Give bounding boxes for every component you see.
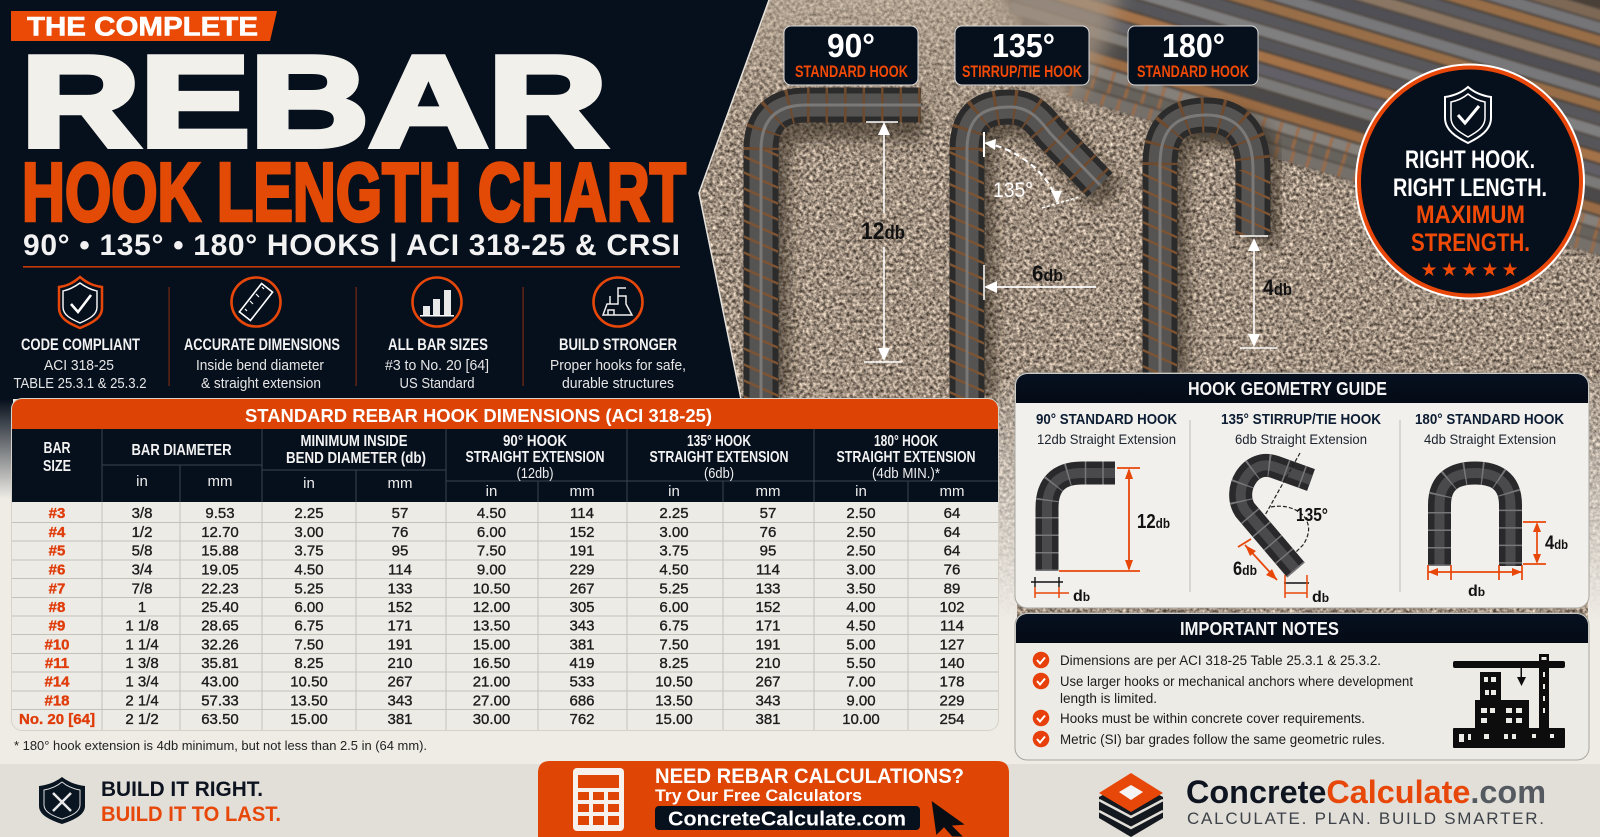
table rows: 22.23 (201, 580, 239, 598)
table rows: 3/4 (132, 562, 152, 578)
feature: all bar sizes (385, 278, 489, 392)
table rows: 191 (387, 636, 413, 654)
table rows: 15.00 (473, 636, 510, 654)
table rows: 15.00 (655, 711, 693, 728)
table rows: 15.00 (290, 711, 328, 728)
table header: in (855, 483, 867, 500)
table rows: 2.50 (846, 542, 876, 560)
logo: concrete calculate (1099, 773, 1546, 837)
table rows: 762 (569, 711, 595, 728)
table rows: 6.00 (294, 599, 324, 616)
note text: length is limited. (1060, 691, 1157, 706)
table rows: 5.50 (846, 655, 876, 672)
table rows: 8.25 (294, 655, 324, 672)
label: 180 degree standard hook (1128, 26, 1258, 85)
table rows: 381 (569, 636, 595, 654)
note text: Metric (SI) bar grades follow the same geometric rules. (1060, 732, 1385, 747)
icon: badge shield (1445, 87, 1491, 143)
table rows: 57.33 (201, 692, 239, 710)
table rows: 19.05 (201, 562, 239, 578)
icon: footer shield (39, 777, 85, 824)
feature: all bar sizes: #3 to No. 20 [64] (385, 358, 489, 374)
table rows: 57 (392, 505, 408, 522)
feature: build stronger: durable structures (562, 376, 674, 392)
table rows: 3.00 (846, 562, 876, 578)
annotation: 4db dimension: 4db (1263, 275, 1292, 300)
table header: BAR DIAMETER (132, 442, 232, 459)
note bullets (1033, 652, 1049, 747)
call to action (538, 761, 1009, 837)
table rows: 43.00 (201, 674, 239, 690)
table rows: 2.25 (294, 505, 324, 522)
table rows: 13.50 (473, 618, 510, 634)
table rows: 5/8 (132, 542, 152, 560)
table rows: #7 (49, 580, 65, 598)
table rows: 1 (138, 599, 146, 616)
cta url box: ConcreteCalculate.com (668, 808, 906, 830)
table rows: #5 (49, 542, 65, 560)
table header: in (668, 483, 680, 500)
feature: code compliant (14, 277, 146, 392)
table rows: #4 (49, 524, 66, 541)
footer band (0, 764, 1600, 837)
table: standard rebar hook dimensions (11, 398, 999, 731)
subtitle rule (23, 266, 680, 268)
table rows: 32.26 (201, 636, 239, 654)
guide column: 135 degree hook: 6db Straight Extension (1235, 431, 1367, 447)
table title bar: STANDARD REBAR HOOK DIMENSIONS (ACI 318-25) (245, 406, 712, 426)
divider 2 (356, 287, 357, 386)
annotation: 12db dimension: 12db (861, 218, 905, 245)
guide column: 180 degree hook: db (1468, 583, 1485, 600)
table rows: 127 (939, 636, 965, 654)
table rows: 1 3/8 (125, 655, 159, 672)
panel: dark title panel (0, 0, 769, 399)
guide column: 180 degree hook: 4db Straight Extension (1424, 431, 1556, 447)
badge: right hook right length: RIGHT HOOK. (1405, 146, 1535, 174)
rebar: 180 degree hook (1143, 115, 1270, 380)
table rows: #11 (45, 655, 69, 672)
table rows: 9.00 (477, 562, 506, 578)
table rows: 76 (392, 524, 408, 541)
table header: STRAIGHT EXTENSION (466, 449, 604, 466)
table rows: 152 (387, 599, 413, 616)
table rows: 229 (939, 692, 965, 710)
table rows: 12.70 (201, 524, 239, 541)
panel: hook geometry guide (1015, 373, 1589, 608)
footnote: * 180° hook extension is 4db minimum, but not less than 2.5 in (64 mm). (14, 739, 427, 753)
table rows: #3 (49, 505, 65, 522)
table rows: 10.50 (655, 674, 693, 690)
table rows: 30.00 (473, 711, 510, 728)
table rows: 343 (387, 692, 413, 710)
table header: MINIMUM INSIDE (300, 433, 408, 450)
photo: concrete surface (690, 0, 1600, 620)
table rows: 381 (387, 711, 413, 728)
table rows: 191 (755, 636, 781, 654)
table rows: 2.50 (846, 524, 876, 541)
panel: hook geometry guide: HOOK GEOMETRY GUIDE (1188, 379, 1387, 399)
table rows: 8.25 (659, 655, 689, 672)
icon: cursor (931, 800, 966, 837)
table rows: #9 (49, 618, 65, 634)
table rows: 533 (569, 674, 595, 690)
table rows: 343 (569, 618, 595, 634)
table body (12, 502, 998, 730)
annotation: 135 degree angle: 135° (993, 179, 1033, 202)
table rows: 64 (944, 524, 960, 541)
guide column: 135 degree hook: 135° (1296, 505, 1328, 525)
icon: ruler (232, 278, 280, 326)
table rows: 171 (755, 618, 781, 634)
table rows: 140 (939, 655, 965, 672)
table rows: 210 (387, 655, 413, 672)
panel edge highlight (699, 0, 769, 399)
table rows: 267 (569, 580, 595, 598)
note text (1060, 653, 1413, 747)
feature: code compliant: ACI 318-25 (44, 358, 114, 374)
table rows: 178 (939, 674, 965, 690)
table rows: 3.00 (294, 524, 324, 541)
table rows: 7.50 (477, 542, 506, 560)
label: 135 degree stirrup/tie hook: STIRRUP/TIE HOOK (962, 62, 1083, 81)
label: 90 degree standard hook (784, 26, 918, 85)
table rows: 89 (944, 580, 960, 598)
table rows: 6.75 (659, 618, 689, 634)
icon: structure (594, 278, 642, 326)
table rows: 13.50 (290, 692, 328, 710)
feature: all bar sizes: ALL BAR SIZES (388, 335, 488, 354)
table header: BEND DIAMETER (db) (286, 450, 426, 467)
table rows: 5.25 (294, 580, 324, 598)
table rows: 10.50 (290, 674, 328, 690)
table rows: 21.00 (473, 674, 510, 690)
table rows: #10 (44, 636, 70, 654)
table rows: 7.50 (659, 636, 689, 654)
table header: (12db) (516, 465, 554, 482)
table rows: 686 (569, 692, 595, 710)
table rows: 3.75 (294, 542, 324, 560)
table header: (4db MIN.)* (872, 465, 940, 482)
annotation: 135 degree angle (984, 132, 1079, 208)
table grid lines (12, 502, 998, 730)
table rows: 152 (569, 524, 595, 541)
table rows: 57 (760, 505, 776, 522)
feature: build stronger: BUILD STRONGER (559, 335, 677, 354)
table rows: 9.00 (846, 692, 876, 710)
photo fade: right margin (1588, 380, 1600, 621)
table header: 180° HOOK (874, 433, 938, 450)
icon: calculator (573, 768, 624, 831)
table rows: 3.75 (659, 542, 689, 560)
table header: 135° HOOK (687, 433, 751, 450)
photo: stack of rebar in the background (1000, 0, 1600, 260)
footer slogan: BUILD IT RIGHT. (101, 778, 263, 801)
table rows: 7/8 (132, 580, 152, 598)
table rows: 95 (760, 542, 776, 560)
table rows: 229 (569, 562, 595, 578)
table rows: #6 (49, 562, 65, 578)
table rows: 267 (387, 674, 413, 690)
table rows: 114 (940, 618, 964, 634)
table rows: 133 (387, 580, 413, 598)
table rows: 3.00 (659, 524, 689, 541)
title tag: the complete: THE COMPLETE (27, 12, 258, 42)
table rows: No. 20 [64] (19, 711, 95, 728)
feature: build stronger (550, 278, 686, 392)
table rows: 114 (756, 562, 780, 578)
icon: bar chart (412, 278, 462, 326)
table header: mm (388, 475, 412, 492)
guide column: 90 degree hook: db (1073, 588, 1090, 605)
annotation: 6db dimension: 6db (1032, 261, 1063, 286)
panel: important notes: IMPORTANT NOTES (1180, 619, 1339, 639)
table rows: 3/8 (132, 505, 152, 522)
table rows: 5.25 (659, 580, 689, 598)
title: hook length chart: HOOK LENGTH CHART (22, 146, 686, 238)
guide column: 180 degree hook (1415, 411, 1568, 600)
subtitle: 90° • 135° • 180° HOOKS | ACI 318-25 & CRSI (23, 229, 680, 262)
logo: concrete calculate: ConcreteCalculate.com (1186, 774, 1546, 810)
badge: right hook right length: RIGHT LENGTH. (1393, 174, 1547, 202)
badge: right hook right length: STRENGTH. (1411, 229, 1530, 257)
table rows: 1 1/4 (125, 636, 159, 654)
table rows: 210 (755, 655, 781, 672)
table rows: 1 1/8 (125, 618, 159, 634)
table rows: 2.25 (659, 505, 689, 522)
table rows: 133 (755, 580, 781, 598)
photo fade: gap between table and guide (998, 380, 1017, 621)
table header: mm (570, 483, 594, 500)
table header: in (303, 475, 315, 492)
table header: BAR (44, 440, 71, 457)
guide column: 180 degree hook: 180° STANDARD HOOK (1415, 411, 1564, 428)
feature: build stronger: Proper hooks for safe, (550, 358, 686, 374)
table rows: 10.50 (473, 580, 510, 598)
label: 180 degree standard hook: STANDARD HOOK (1137, 62, 1250, 81)
feature: code compliant: CODE COMPLIANT (21, 335, 140, 354)
icon: crane and building (1453, 654, 1565, 748)
table header: SIZE (43, 458, 71, 475)
table rows: 4.50 (659, 562, 689, 578)
table rows: 1/2 (132, 524, 152, 541)
guide column: 135 degree hook (1221, 411, 1381, 606)
rebar: 135 degree hook (950, 107, 1110, 400)
table rows: 6.00 (477, 524, 506, 541)
guide column: 135 degree hook: 6db (1233, 559, 1257, 580)
guide column: 90 degree hook: 12db Straight Extension (1037, 431, 1176, 447)
table rows: 419 (569, 655, 595, 672)
call to action: Try Our Free Calculators (655, 786, 862, 805)
label: 180 degree standard hook: 180° (1162, 27, 1225, 64)
note text: Dimensions are per ACI 318-25 Table 25.3.1 & 25.3.2. (1060, 653, 1381, 668)
table rows: 114 (388, 562, 412, 578)
call to action: NEED REBAR CALCULATIONS? (655, 765, 964, 788)
feature: accurate dimensions (184, 278, 340, 392)
table rows: 305 (569, 599, 595, 616)
table rows: 6.00 (659, 599, 689, 616)
badge: right hook right length (1355, 64, 1585, 300)
rebar: 90 degree hook (744, 105, 925, 400)
table rows: 16.50 (473, 655, 510, 672)
guide column: 135 degree hook: db (1312, 589, 1329, 606)
table rows: 76 (760, 524, 776, 541)
table header: in (486, 483, 497, 500)
badge: right hook right length: ★★★★★ (1420, 259, 1518, 281)
table rows: 4.50 (294, 562, 324, 578)
icon: shield check (59, 277, 102, 328)
photo: out of focus blend at left of bar stack (985, 0, 1120, 100)
table rows: 27.00 (473, 692, 510, 710)
guide column: 90 degree hook (1031, 411, 1177, 605)
table header (12, 429, 998, 502)
table rows: 267 (755, 674, 781, 690)
title: rebar: REBAR (21, 30, 607, 174)
feature: accurate dimensions: Inside bend diameter (196, 358, 324, 374)
table rows (19, 505, 965, 728)
table rows: 102 (939, 599, 965, 616)
table rows: 254 (939, 711, 965, 728)
panel: important notes (1015, 613, 1589, 760)
note text: Hooks must be within concrete cover requirements. (1060, 711, 1365, 726)
footer slogan: BUILD IT TO LAST. (101, 803, 281, 826)
table rows: 7.50 (294, 636, 324, 654)
divider 1 (168, 287, 170, 386)
left edge fade (0, 399, 13, 499)
table rows: 4.00 (846, 599, 876, 616)
table rows: 25.40 (201, 599, 239, 616)
table rows: 64 (944, 542, 960, 560)
table rows: 2 1/4 (125, 692, 159, 710)
table rows: 4.50 (477, 505, 506, 522)
table rows: 2 1/2 (125, 711, 159, 728)
table rows: 4.50 (846, 618, 876, 634)
table header: mm (756, 483, 780, 500)
table rows: 343 (755, 692, 781, 710)
table rows: 9.53 (205, 505, 235, 522)
table rows: 6.75 (294, 618, 324, 634)
guide column: 90 degree hook: 90° STANDARD HOOK (1036, 411, 1177, 428)
table rows: 3.50 (846, 580, 876, 598)
table rows: 381 (755, 711, 781, 728)
table rows: 63.50 (201, 711, 239, 728)
divider 3 (522, 287, 524, 386)
guide column: 180 degree hook: 4db (1545, 533, 1568, 554)
table rows: 13.50 (655, 692, 693, 710)
annotation: 12db dimension (861, 122, 905, 362)
icon: logo mark (1099, 773, 1163, 837)
table rows: 114 (570, 505, 594, 522)
badge: right hook right length: MAXIMUM (1416, 201, 1525, 229)
annotation: 6db dimension (984, 261, 1096, 300)
table rows: 10.00 (842, 711, 880, 728)
feature: code compliant: TABLE 25.3.1 & 25.3.2 (14, 376, 146, 392)
table rows: #8 (49, 599, 65, 616)
footer slogan (39, 777, 281, 826)
table header: in (136, 473, 148, 490)
table rows: 28.65 (201, 618, 239, 634)
feature: accurate dimensions: & straight extension (201, 376, 321, 392)
feature: accurate dimensions: ACCURATE DIMENSIONS (184, 335, 340, 354)
feature: all bar sizes: US Standard (400, 376, 474, 392)
table rows: 95 (392, 542, 408, 560)
table header: STRAIGHT EXTENSION (836, 449, 976, 466)
table rows: 35.81 (201, 655, 239, 672)
table rows: #14 (44, 674, 70, 690)
table header: (6db) (704, 465, 734, 482)
guide column: 135 degree hook: 135° STIRRUP/TIE HOOK (1221, 411, 1381, 428)
table rows: 64 (944, 505, 960, 522)
note text: Use larger hooks or mechanical anchors where development (1060, 674, 1413, 689)
table rows: 171 (387, 618, 413, 634)
table rows: 5.00 (846, 636, 876, 654)
table rows: 2.50 (846, 505, 876, 522)
table rows: 1 3/4 (125, 674, 159, 690)
table rows: 15.88 (201, 542, 239, 560)
table title bar (12, 399, 998, 429)
table header: 90° HOOK (503, 433, 567, 450)
table header: mm (208, 473, 232, 490)
table rows: 152 (755, 599, 781, 616)
table header: mm (940, 483, 964, 500)
annotation: 4db dimension (1240, 236, 1292, 348)
table rows: #18 (44, 692, 70, 710)
label: 90 degree standard hook: 90° (827, 27, 875, 64)
label: 135 degree stirrup/tie hook: 135° (992, 27, 1055, 64)
guide column: 90 degree hook: 12db (1137, 511, 1170, 533)
table rows: 12.00 (473, 599, 510, 616)
table rows: 76 (944, 562, 960, 578)
table rows: 191 (569, 542, 595, 560)
table header: STRAIGHT EXTENSION (650, 449, 788, 466)
label: 135 degree stirrup/tie hook (955, 26, 1089, 85)
table rows: 7.00 (846, 674, 876, 690)
logo: concrete calculate: CALCULATE. PLAN. BUILD SMARTER. (1187, 809, 1544, 828)
label: 90 degree standard hook: STANDARD HOOK (795, 62, 909, 81)
